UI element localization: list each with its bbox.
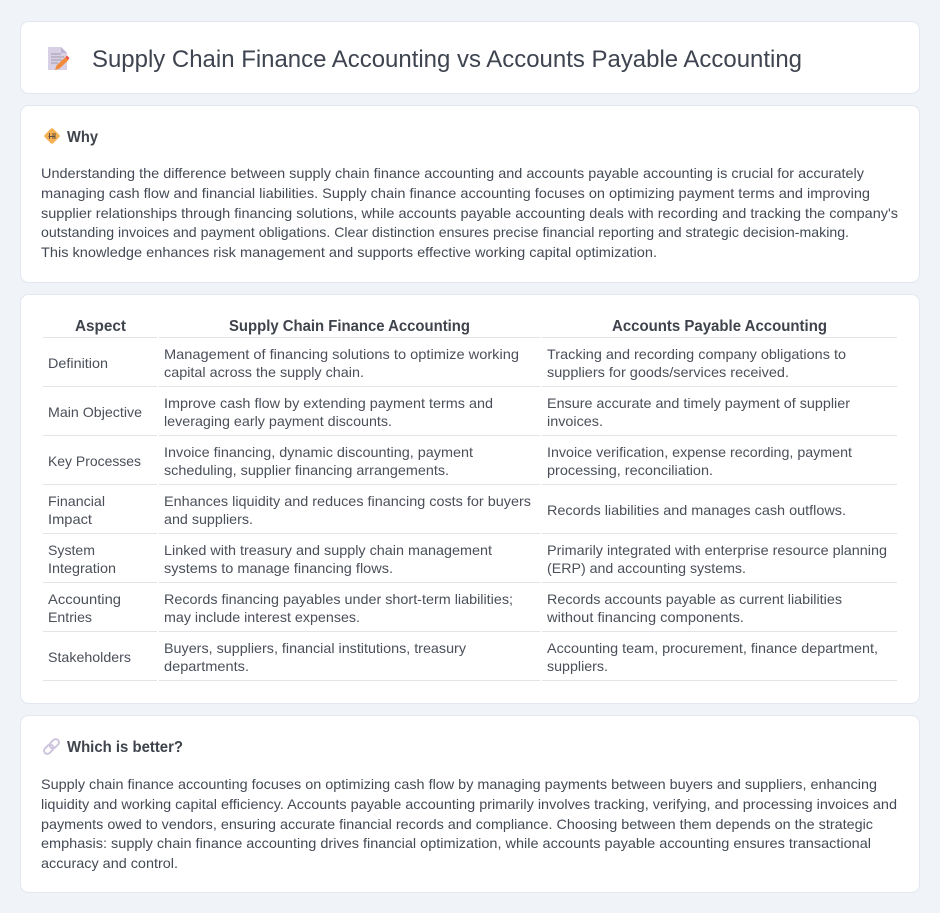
text block: which is better: emphasis: supply chain finance accounting drives financial optimization, while accounts payable accounting ensures transactional [41, 835, 871, 851]
table header: Aspect [75, 318, 127, 335]
row: stakeholders: Buyers, suppliers, financial institutions, treasury [164, 640, 466, 656]
table header: Accounts Payable Accounting [612, 318, 827, 335]
row: main objective: invoices. [547, 413, 603, 429]
panel: why [20, 106, 920, 282]
row: system integration: Integration [48, 560, 116, 576]
row: main objective: Improve cash flow by extending payment terms and [164, 395, 493, 411]
row: stakeholders [48, 640, 878, 674]
heading: why: Why [67, 129, 98, 146]
icon: warning diamond [44, 128, 60, 144]
row: financial impact: Financial [48, 493, 105, 509]
row: system integration: (ERP) and accounting systems. [547, 560, 746, 576]
row: definition: capital across the supply chain. [164, 364, 364, 380]
row: definition: Definition [48, 355, 108, 371]
row: system integration: Primarily integrated with enterprise resource planning [547, 542, 887, 558]
panel: which is better [20, 716, 920, 892]
row: stakeholders: departments. [164, 658, 249, 674]
row: main objective [48, 395, 850, 429]
row: system integration: systems to manage financing flows. [164, 560, 393, 576]
row: system integration: System [48, 542, 95, 558]
row: main objective: leveraging early payment discounts. [164, 413, 392, 429]
icon: document with pencil [48, 47, 70, 70]
row: accounting entries: Records accounts payable as current liabilities [547, 591, 842, 607]
row: key processes: processing, reconciliation. [547, 462, 713, 478]
title: Supply Chain Finance Accounting vs Accounts Payable Accounting [92, 46, 802, 73]
row: definition: suppliers for goods/services received. [547, 364, 789, 380]
text block: why: outstanding invoices and payment obligations. Clear distinction ensures precise financial reporting and strategic decision-making. [41, 224, 849, 240]
row: key processes: Invoice verification, expense recording, payment [547, 444, 852, 460]
row: key processes [48, 444, 852, 478]
row: accounting entries: may include interest expenses. [164, 609, 360, 625]
row: key processes: Key Processes [48, 453, 141, 469]
heading: which is better: Which is better? [67, 739, 183, 756]
row: definition: Tracking and recording company obligations to [547, 346, 846, 362]
row: stakeholders: suppliers. [547, 658, 608, 674]
text block: which is better: liquidity and working capital efficiency. Accounts payable accounting primarily involves tracking, verifying, and processing invoices and [41, 796, 897, 812]
text block: why: managing cash flow and financial liabilities. Supply chain finance accounting focuses on optimizing payment terms and improving [41, 185, 870, 201]
text block: why [41, 165, 898, 260]
text block: which is better: payments owed to vendors, ensuring accurate financial records and compliance. Choosing between them depends on the strategic [41, 816, 873, 832]
text block: why: Understanding the difference between supply chain finance accounting and accounts payable accounting is crucial for accurately [41, 165, 864, 181]
table header: Supply Chain Finance Accounting [229, 318, 470, 335]
text block: which is better: accuracy and control. [41, 855, 178, 871]
row: financial impact [48, 493, 846, 527]
row: definition: Management of financing solutions to optimize working [164, 346, 519, 362]
row: system integration [48, 542, 887, 576]
text block: why: This knowledge enhances risk management and supports effective working capital optimization. [41, 244, 657, 260]
row: stakeholders: Stakeholders [48, 649, 131, 665]
row: accounting entries: Entries [48, 609, 92, 625]
text block: which is better [41, 776, 897, 871]
row: financial impact: Impact [48, 511, 92, 527]
row: financial impact: Enhances liquidity and reduces financing costs for buyers [164, 493, 531, 509]
row: accounting entries [48, 591, 842, 625]
row: accounting entries: without financing components. [546, 609, 744, 625]
row: main objective: Main Objective [48, 404, 142, 420]
text block: which is better: Supply chain finance accounting focuses on optimizing cash flow by managing payments between buyers and suppliers, enhancing [41, 776, 877, 792]
icon: chain link [43, 738, 60, 755]
panel: comparison table [20, 294, 920, 704]
table header [75, 318, 827, 335]
row: accounting entries: Records financing payables under short-term liabilities; [164, 591, 513, 607]
row: definition [48, 346, 846, 380]
row: financial impact: Records liabilities and manages cash outflows. [547, 502, 846, 518]
row: key processes: scheduling, supplier financing arrangements. [164, 462, 449, 478]
row: key processes: Invoice financing, dynamic discounting, payment [164, 444, 473, 460]
row: stakeholders: Accounting team, procurement, finance department, [547, 640, 878, 656]
row: accounting entries: Accounting [48, 591, 121, 607]
row: main objective: Ensure accurate and timely payment of supplier [547, 395, 850, 411]
row: system integration: Linked with treasury and supply chain management [164, 542, 492, 558]
panel: title header [20, 22, 920, 94]
row: financial impact: and suppliers. [164, 511, 253, 527]
text block: why: supplier relationships through financing solutions, while accounts payable accounting deals with recording and tracking the company's [41, 205, 898, 221]
